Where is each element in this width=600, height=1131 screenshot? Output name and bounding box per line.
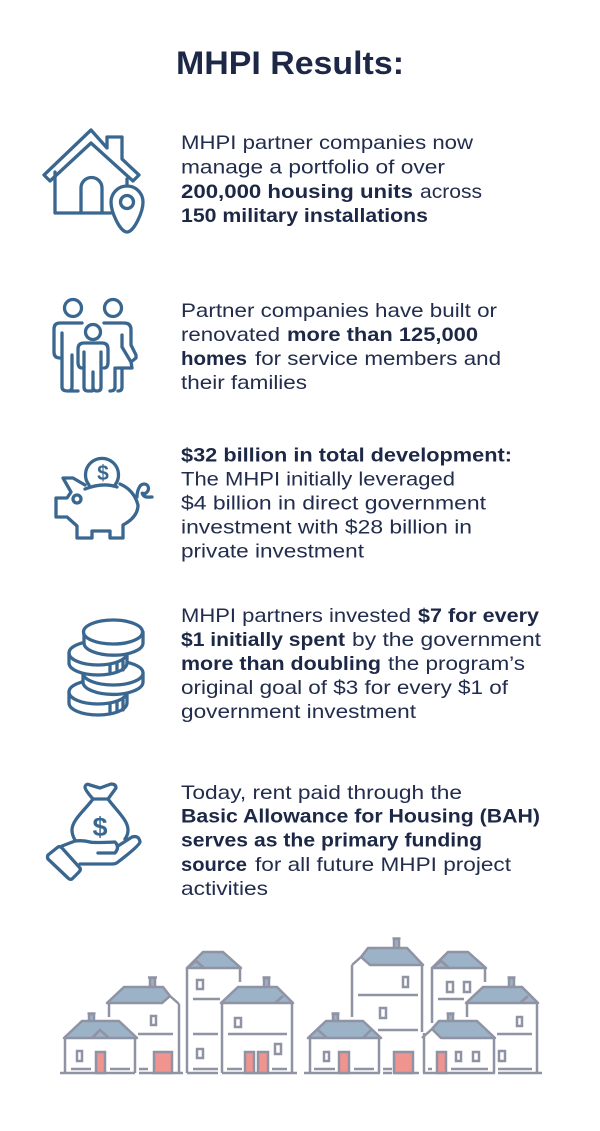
text: development statistic: private investment (181, 540, 365, 562)
icon: coin stacks (69, 620, 143, 715)
text: allowance statistic: for all future MHPI project (255, 854, 512, 876)
text: development statistic: $4 billion in direct government (181, 492, 487, 514)
houses: left group (60, 952, 297, 1073)
houses: right group (304, 938, 542, 1073)
text: portfolio statistic: across (420, 181, 482, 203)
text: development statistic: investment with $28 billion in (181, 516, 472, 538)
text: allowance statistic: Basic Allowance for Housing (BAH) (181, 806, 540, 828)
text: portfolio statistic: 200,000 housing units (181, 181, 413, 203)
text: development statistic: $32 billion in total development: (181, 444, 512, 466)
panel: housing allowance (48, 782, 540, 900)
text: investment statistic: government investment (181, 701, 417, 723)
text: investment statistic: original goal of $3 for every $1 of (181, 677, 509, 699)
illustration: row of houses (60, 938, 542, 1073)
text: allowance statistic (181, 782, 540, 900)
text: homes statistic: homes (181, 348, 247, 370)
text: development statistic: The MHPI initially leveraged (181, 468, 455, 490)
text: homes statistic: for service members and (255, 348, 501, 370)
text: homes statistic: renovated (181, 324, 280, 346)
text: homes statistic (181, 300, 501, 394)
icon: piggy bank (56, 458, 152, 538)
text: investment statistic: $7 for every (418, 605, 539, 627)
text: homes statistic: their families (181, 372, 307, 394)
text: development statistic (181, 444, 512, 562)
title: MHPI Results: (176, 45, 404, 81)
icon: hand holding money bag (48, 784, 140, 879)
text: allowance statistic: source (181, 854, 247, 876)
panel: total development (56, 444, 512, 562)
panel: homes built (54, 300, 501, 394)
text: investment statistic: $1 initially spent (181, 629, 346, 651)
text: investment statistic: more than doubling (181, 653, 381, 675)
text: allowance statistic: Today, rent paid through the (181, 782, 462, 804)
text: portfolio statistic: 150 military installations (181, 205, 428, 227)
text: portfolio statistic: MHPI partner companies now (181, 132, 474, 154)
icon: family (54, 300, 136, 391)
text: investment statistic: by the government (352, 629, 542, 651)
text: homes statistic: Partner companies have built or (181, 300, 498, 322)
icon: piggy bank: $ (97, 462, 109, 485)
text: portfolio statistic: manage a portfolio of over (181, 156, 446, 178)
panel: housing portfolio (44, 130, 482, 232)
text: investment statistic: the program’s (388, 653, 525, 675)
text: homes statistic: more than 125,000 (287, 324, 478, 346)
text: allowance statistic: serves as the primary funding (181, 830, 482, 852)
text: allowance statistic: activities (181, 878, 268, 900)
panel: private investment ratio (69, 605, 542, 723)
text: investment statistic (181, 605, 542, 723)
text: portfolio statistic (181, 132, 482, 227)
icon: house with location pin (44, 130, 143, 232)
icon: hand holding money bag: $ (92, 812, 108, 842)
text: investment statistic: MHPI partners invested (181, 605, 411, 627)
